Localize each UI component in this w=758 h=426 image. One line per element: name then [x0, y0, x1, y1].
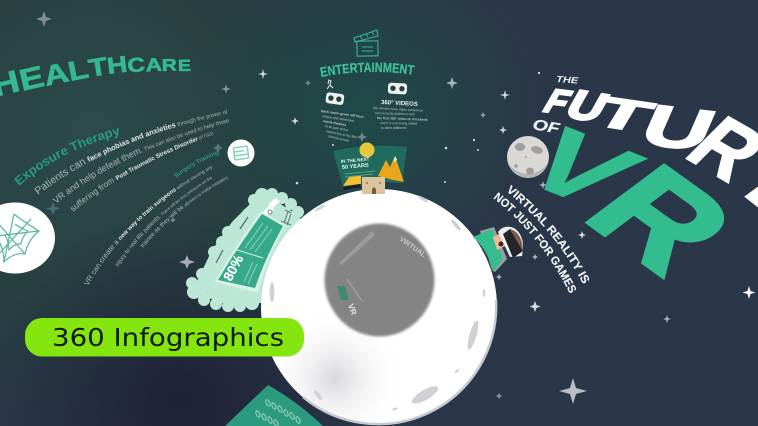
cloud: surgery training illustration: [186, 188, 304, 312]
cardboard headset: [362, 177, 385, 194]
moon icon: [507, 136, 549, 178]
column: 360 videos: the first 360° video on Facebook: [377, 116, 428, 122]
text block: exposure therapy: Patients can face phobias and anxieties through the power of: [34, 110, 227, 194]
column: 360 videos: [373, 83, 428, 130]
column: 360 videos: 360° VIDEOS: [381, 100, 418, 108]
title: of: OF: [531, 116, 562, 138]
icon: spider web badge: [0, 202, 55, 274]
text block: exposure therapy: VR and help defeat them. This can also be used to help those: [52, 119, 230, 202]
text block: surgery training: Surgery Training: [174, 151, 219, 178]
panel: in the next 50 years poster: IN THE NEXT: [341, 157, 370, 164]
title: future: T: [585, 89, 662, 141]
text block: exposure therapy: Exposure Therapy: [14, 128, 119, 186]
gray reflection disc: VR: [346, 303, 358, 316]
heading: healthcare: C: [126, 53, 146, 77]
text block: exposure therapy: suffering from Post Traumatic Stress Disorder (PTSD).: [70, 132, 214, 212]
tagline: NOT JUST FOR GAMES: [494, 192, 576, 293]
title: future: F: [537, 83, 578, 121]
title: v: V: [496, 110, 664, 225]
title: future: [537, 81, 758, 242]
text block: surgery training: VR can create a new way to train surgeons without causing any: [84, 166, 212, 284]
title: the: THE: [556, 74, 580, 86]
heading: healthcare: L: [66, 54, 91, 87]
column: 360 videos: We will see more video content on: [373, 106, 423, 113]
icon: screen badge: [228, 140, 254, 166]
icon: clapperboard: [354, 30, 378, 56]
column: vr movies: experience in the film: [326, 129, 357, 140]
column: 360 videos: and it is now being added: [380, 121, 418, 126]
caption pill: [25, 318, 304, 356]
medical poster card: 80%: [220, 252, 246, 283]
heading: healthcare: H: [106, 52, 129, 79]
caption pill: 360 Infographics: [52, 323, 284, 352]
title: future: U: [632, 93, 725, 163]
panel: bottom teal poster: [225, 385, 323, 426]
planet: [261, 189, 497, 425]
heading: healthcare: R: [161, 56, 177, 75]
heading: healthcare: A: [145, 55, 163, 76]
heading: healthcare: T: [86, 52, 109, 82]
column: vr movies: movie theatres: [323, 119, 347, 127]
heading: entertainment: ENTERTAINMENT: [320, 62, 415, 77]
gray reflection disc: [324, 224, 434, 336]
column: vr movies: to be part of the: [325, 124, 348, 132]
heading: healthcare: E: [16, 60, 47, 98]
column: vr movies: unique and immersive: [322, 114, 354, 123]
panel: in the next 50 years poster: [333, 142, 407, 190]
character wearing vr headset: [473, 227, 523, 272]
column: 360 videos: to other platforms: [381, 126, 407, 130]
title: future: U: [558, 81, 617, 130]
heading: healthcare: [0, 52, 191, 104]
column: vr movies: [321, 80, 364, 143]
column: vr movies: cinema screen: [328, 134, 350, 143]
text block: surgery training: trainee as they will be allowed to make mistakes: [140, 176, 228, 248]
panel: in the next 50 years poster: 50 YEARS: [342, 163, 369, 171]
tagline: VIRTUAL REALITY IS: [508, 184, 590, 284]
column: 360 videos: social media platforms with: [375, 111, 415, 116]
text block: surgery training: injury to real life patients. There will be less pressure on the: [114, 176, 212, 267]
heading: healthcare: A: [41, 56, 71, 92]
surgical props: [216, 198, 291, 263]
heading: healthcare: E: [178, 56, 191, 75]
gray reflection disc: VIRTUAL: [398, 236, 427, 259]
column: vr movies: Each movie genre will have: [321, 109, 364, 119]
